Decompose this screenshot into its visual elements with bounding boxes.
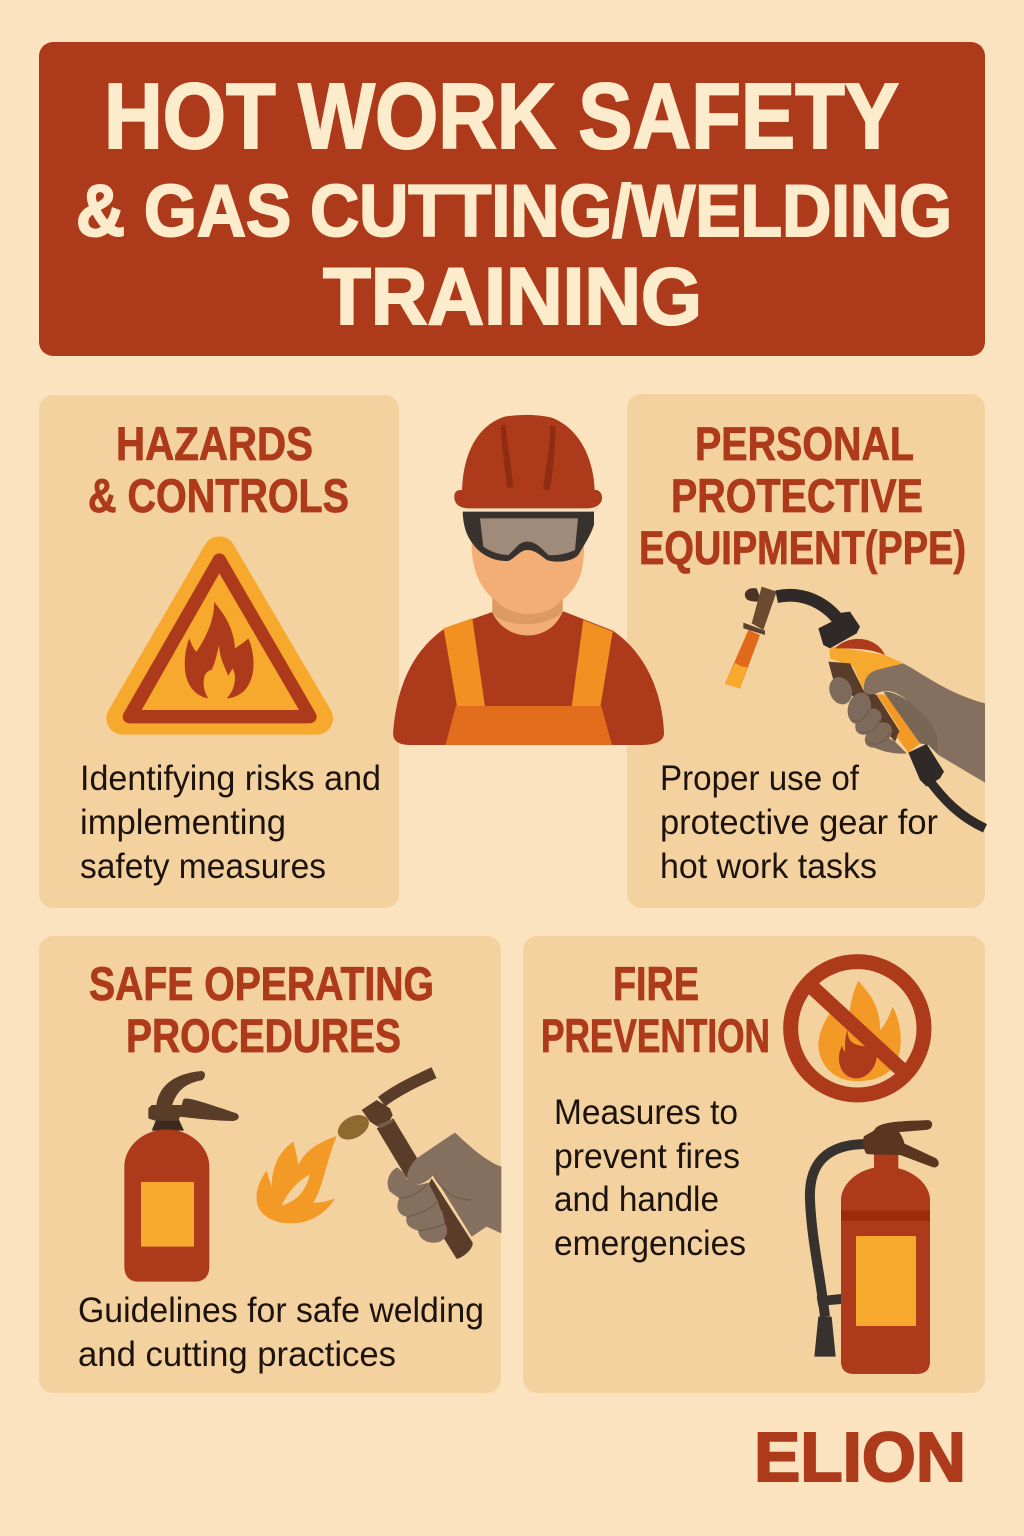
- heading: fire prevention: FIRE: [613, 957, 699, 1010]
- heading: hazards and controls: & CONTROLS: [88, 469, 349, 522]
- panel: hazards and controls: [39, 395, 399, 908]
- heading: fire prevention: PREVENTION: [541, 1009, 770, 1062]
- text: SOP description: [78, 1291, 484, 1374]
- text: hazards description: safety measures: [80, 847, 326, 886]
- text: fire prevention description: prevent fires: [554, 1137, 740, 1176]
- heading: PPE: PROTECTIVE: [671, 469, 923, 522]
- icon: gloved hand holding gas torch: [334, 1073, 501, 1259]
- icon: fire extinguisher: [124, 1071, 239, 1282]
- text: fire prevention description: and handle: [554, 1180, 719, 1219]
- heading: safe operating procedures: SAFE OPERATING: [89, 957, 434, 1010]
- text: fire prevention description: emergencies: [554, 1224, 746, 1263]
- heading: fire prevention: [541, 957, 770, 1062]
- heading: PPE: [639, 417, 966, 574]
- icon: no fire sign: [791, 962, 924, 1095]
- title banner: [39, 42, 985, 356]
- text: PPE description: protective gear for: [660, 803, 938, 842]
- title banner: TRAINING: [323, 252, 702, 342]
- text: hazards description: implementing: [80, 803, 286, 842]
- heading: safe operating procedures: PROCEDURES: [126, 1009, 401, 1062]
- icon: fire extinguisher with hose: [810, 1121, 938, 1374]
- text: PPE description: Proper use of: [660, 759, 859, 798]
- heading: safe operating procedures: [89, 957, 434, 1062]
- heading: PPE: PERSONAL: [695, 417, 914, 470]
- panel: personal protective equipment: [627, 394, 985, 908]
- icon: flame: [257, 1136, 337, 1223]
- title banner: HOT WORK SAFETY: [104, 64, 899, 168]
- logo: ELION: ELION: [754, 1418, 966, 1496]
- icon: worker with helmet and goggles: [393, 415, 664, 745]
- icon: fire warning triangle: [123, 553, 317, 718]
- worker head and goggles: [463, 512, 594, 636]
- title banner: & GAS CUTTING/WELDING: [76, 171, 952, 252]
- icon: gloved hand holding welding torch: [725, 587, 985, 828]
- text: SOP description: and cutting practices: [78, 1335, 396, 1374]
- panel: fire prevention: [523, 936, 985, 1393]
- text: PPE description: hot work tasks: [660, 847, 877, 886]
- text: PPE description: [660, 759, 938, 886]
- text: fire prevention description: [554, 1093, 746, 1263]
- text: fire prevention description: Measures to: [554, 1093, 738, 1132]
- text: hazards description: Identifying risks and: [80, 759, 381, 798]
- heading: hazards and controls: [88, 417, 349, 522]
- worker helmet: [454, 415, 602, 508]
- worker body: [393, 612, 664, 745]
- panel: safe operating procedures: [39, 936, 501, 1393]
- text: SOP description: Guidelines for safe welding: [78, 1291, 484, 1330]
- text: hazards description: [80, 759, 381, 886]
- heading: hazards and controls: HAZARDS: [116, 417, 313, 470]
